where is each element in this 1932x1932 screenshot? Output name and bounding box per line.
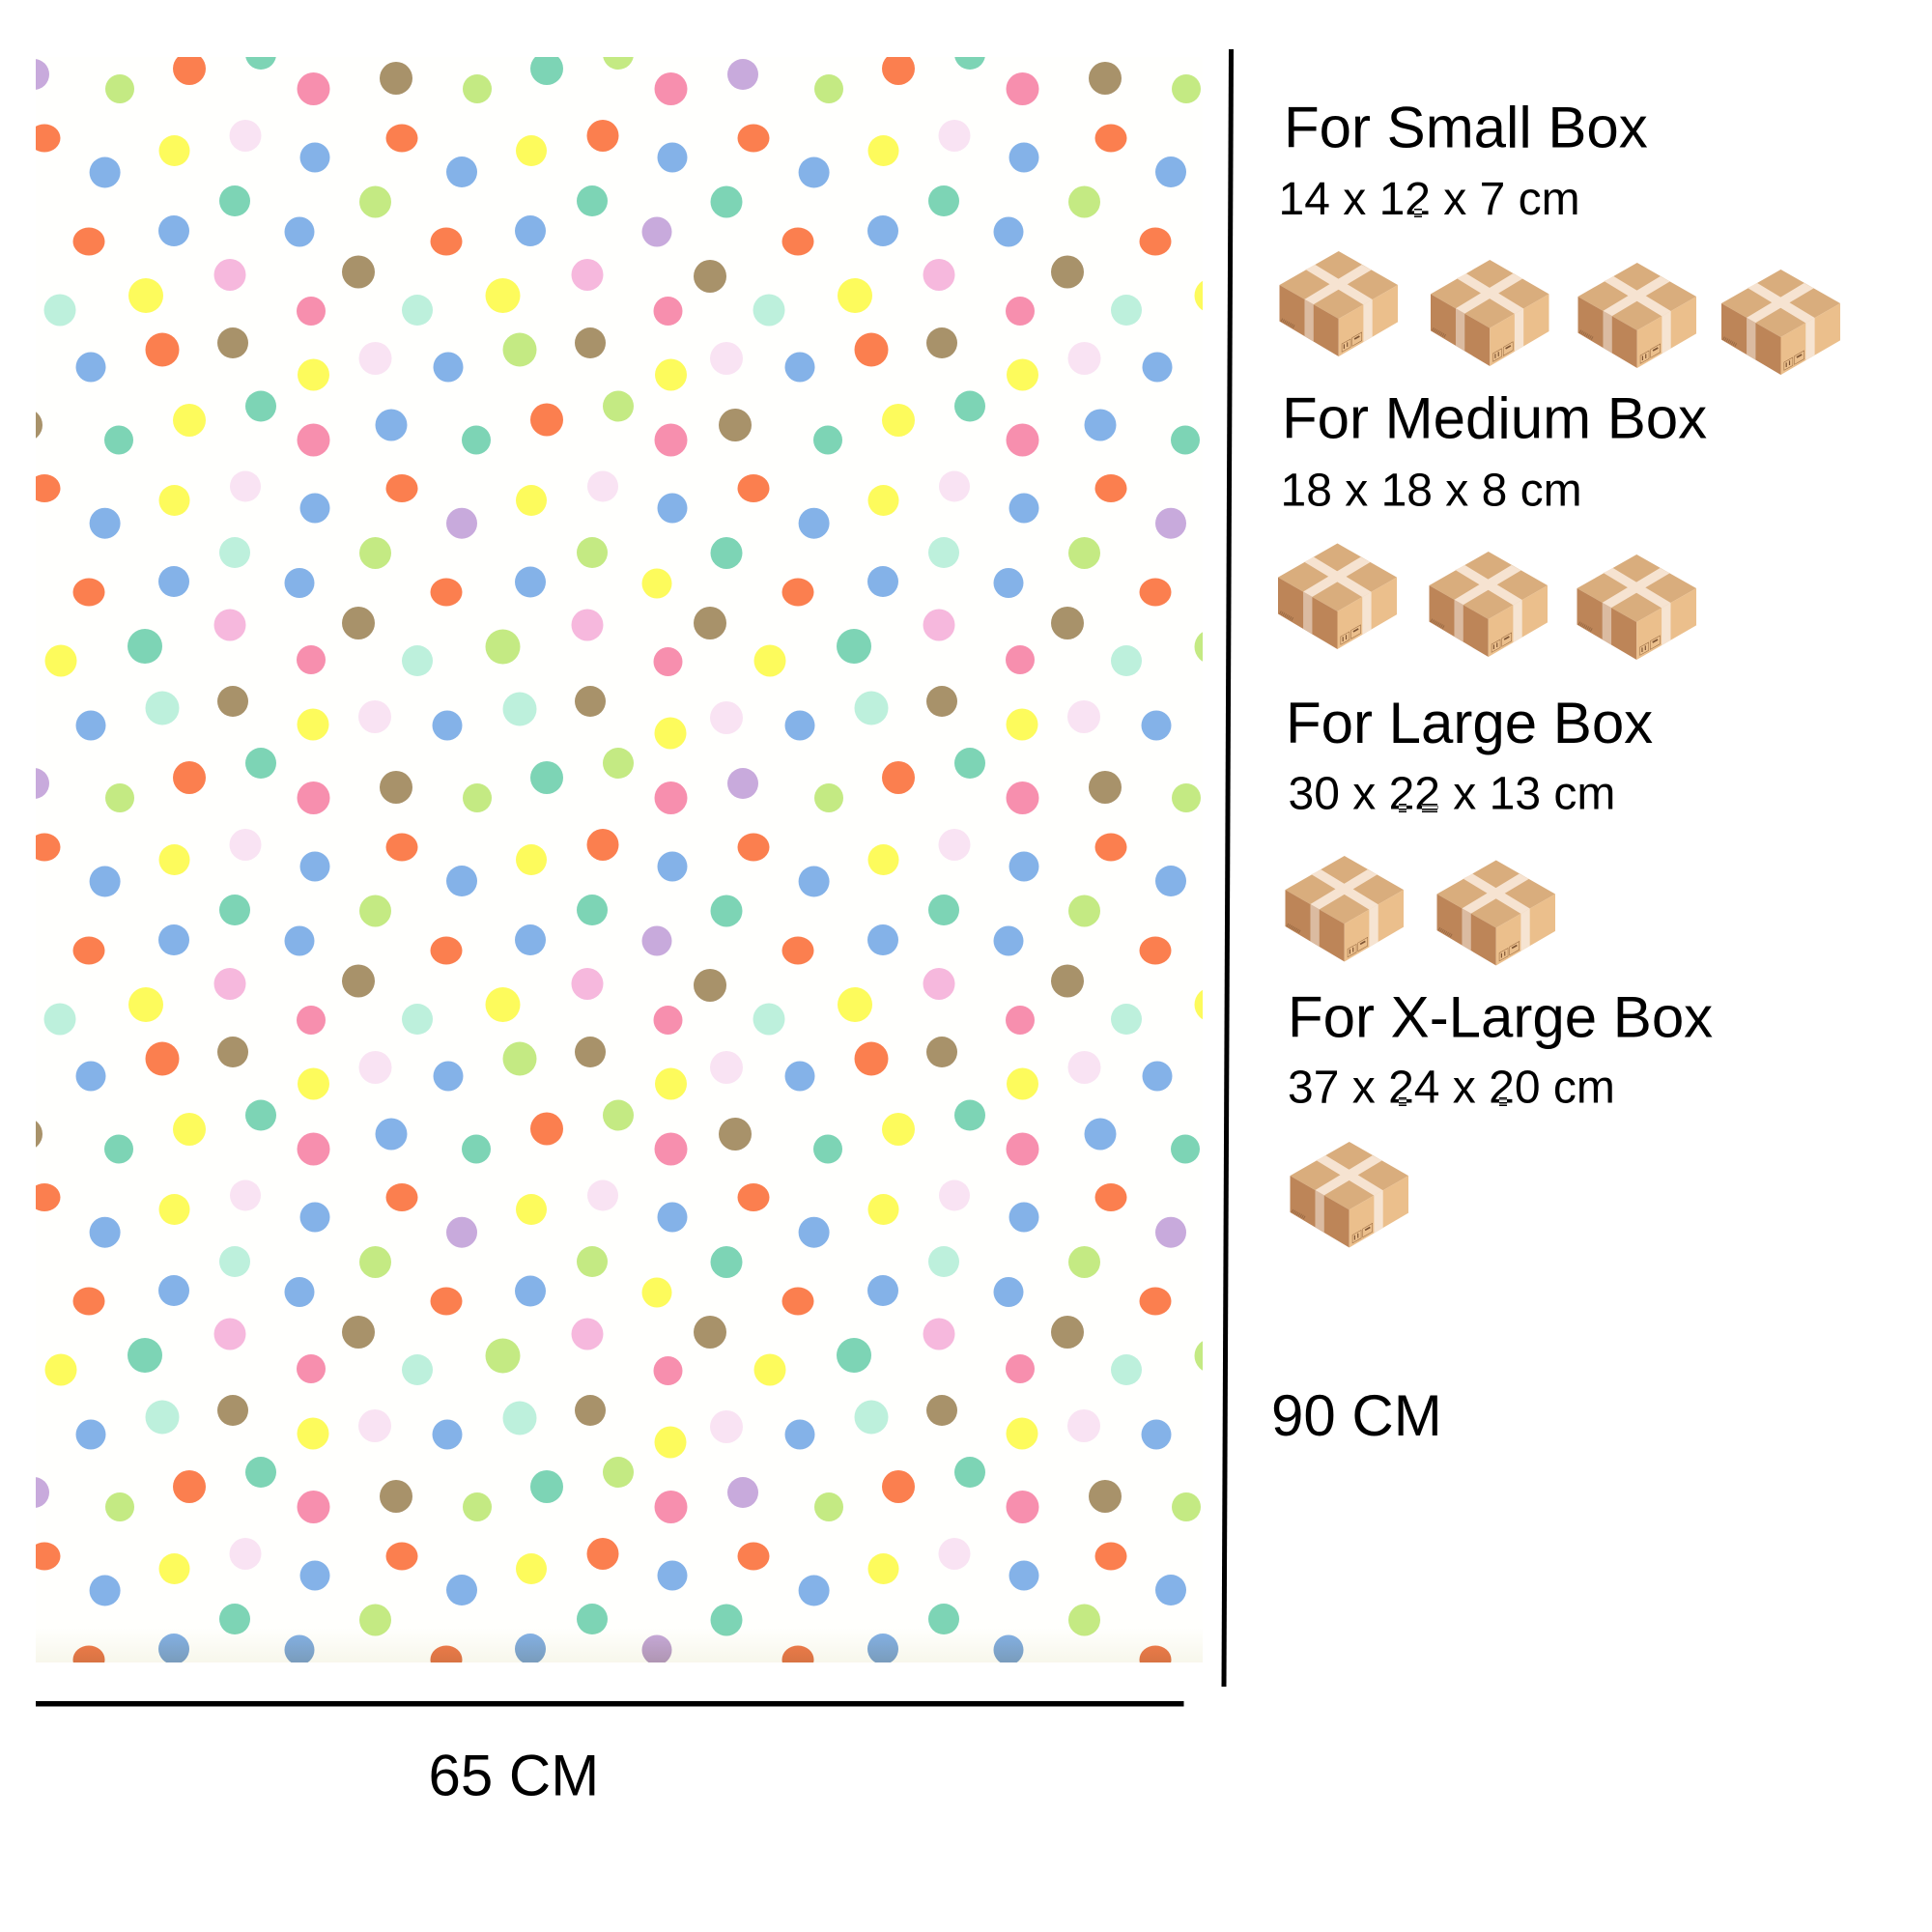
dimensions: large box: 30 x 22 x 13 cm xyxy=(1289,769,1615,819)
heading: x-large box: For X-Large Box xyxy=(1288,985,1713,1049)
artifact mark xyxy=(1399,1097,1406,1106)
section: small box xyxy=(1279,95,1840,375)
section: medium box xyxy=(1278,386,1707,660)
artifact mark xyxy=(1422,804,1437,812)
dimensions: medium box: 18 x 18 x 8 cm xyxy=(1281,466,1582,516)
icon: box 2 xyxy=(1431,260,1549,366)
width label: 65 CM: 65 CM xyxy=(429,1743,599,1808)
icon: box 3 xyxy=(1577,554,1696,660)
icon: box 1 xyxy=(1291,1142,1408,1248)
icon: box 2 xyxy=(1430,552,1548,657)
icon: box 1 xyxy=(1279,251,1398,356)
dimensions: x-large box: 37 x 24 x 20 cm xyxy=(1288,1063,1615,1113)
height dimension line xyxy=(1224,49,1231,1687)
icon: box 4 xyxy=(1721,270,1840,375)
panel: polka dot wrapping paper xyxy=(36,57,1203,1662)
artifact mark xyxy=(1399,804,1406,812)
height label: 90 CM: 90 CM xyxy=(1271,1383,1442,1448)
width dimension line xyxy=(36,1701,1184,1706)
section: large box xyxy=(1285,691,1653,966)
heading: large box: For Large Box xyxy=(1286,691,1653,755)
dimensions: small box: 14 x 12 x 7 cm xyxy=(1279,174,1580,225)
heading: small box: For Small Box xyxy=(1284,95,1648,160)
icon: box 1 xyxy=(1285,856,1404,962)
section: x-large box xyxy=(1288,985,1713,1248)
heading: medium box: For Medium Box xyxy=(1282,386,1707,450)
icon: box 2 xyxy=(1437,860,1555,966)
icon: box 3 xyxy=(1578,263,1696,368)
artifact mark xyxy=(1414,209,1422,217)
artifact mark xyxy=(1499,1097,1507,1106)
icon: box 1 xyxy=(1278,543,1397,649)
